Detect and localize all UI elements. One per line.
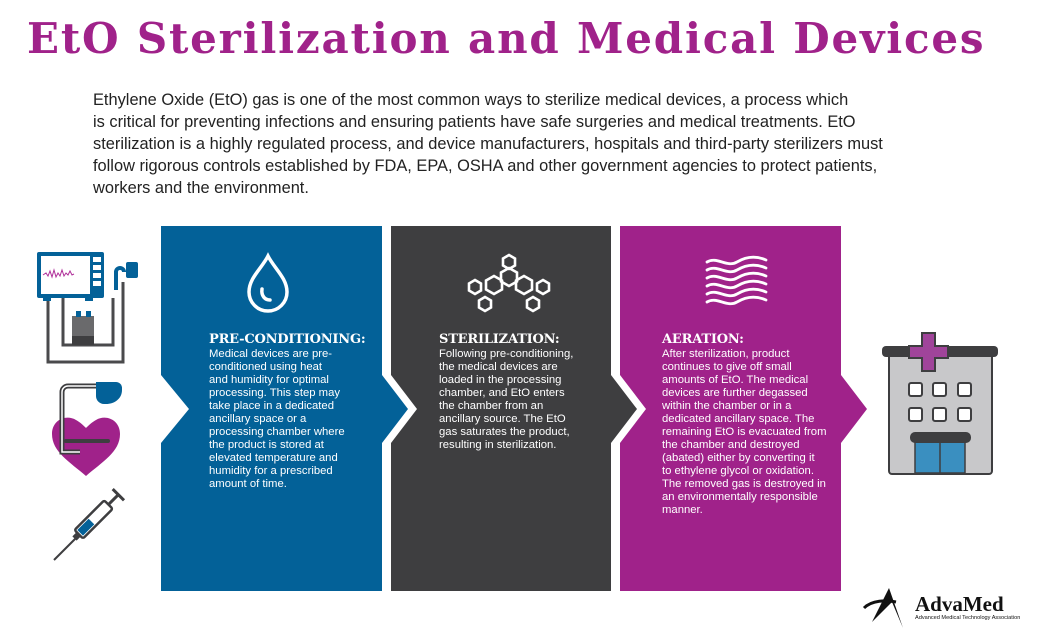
- text: sterilization: chamber, and EtO enters: [439, 387, 565, 399]
- text: aeration: devices are further degassed: [662, 387, 808, 399]
- title: EtO Sterilization and Medical Devices: [27, 14, 985, 63]
- text: pre-conditioning: [209, 332, 365, 490]
- text: pre-conditioning: elevated temperature and: [209, 452, 338, 464]
- panel: pre-conditioning: [161, 226, 408, 591]
- icon: molecule hexagons: [469, 255, 549, 311]
- text: aeration: (abated) either by converting it: [662, 452, 815, 464]
- text: sterilization: Following pre-conditioning,: [439, 348, 573, 360]
- text: aeration: within the chamber or in a: [662, 400, 791, 412]
- text: sterilization: the chamber from an: [439, 400, 543, 412]
- text: pre-conditioning: take place in a dedicated: [209, 400, 334, 412]
- text: aeration: AERATION:: [662, 332, 744, 347]
- text: sterilization: [439, 332, 573, 451]
- panel: sterilization: [391, 226, 637, 591]
- text: sterilization: loaded in the processing: [439, 374, 561, 386]
- text: sterilization: gas saturates the product,: [439, 426, 570, 438]
- logo text: [915, 592, 1020, 621]
- text: aeration: remaining EtO is evacuated from: [662, 426, 827, 438]
- intro text: is critical for preventing infections and ensuring patients have safe surgeries and medical treatments. EtO: [93, 113, 856, 131]
- panel: aeration: [620, 226, 867, 591]
- text: aeration: manner.: [662, 504, 703, 516]
- text: pre-conditioning: humidity for a prescribed: [209, 465, 333, 477]
- text: pre-conditioning: processing. This step may: [209, 387, 340, 399]
- text: pre-conditioning: ancillary space or a: [209, 413, 306, 425]
- icon: patient monitor: [37, 252, 138, 362]
- text: sterilization: resulting in sterilization.: [439, 439, 556, 451]
- text: sterilization: STERILIZATION:: [439, 332, 559, 347]
- intro text: [93, 91, 883, 197]
- intro text: follow rigorous controls established by FDA, EPA, OSHA and other government agencies to protect patients,: [93, 157, 877, 175]
- text: aeration: dedicated ancillary space. The: [662, 413, 814, 425]
- text: pre-conditioning: Medical devices are pre-: [209, 348, 332, 360]
- text: pre-conditioning: PRE-CONDITIONING:: [209, 332, 365, 347]
- logo: AdvaMed mark: [864, 588, 903, 628]
- text: aeration: [662, 332, 827, 516]
- text: aeration: to ethylene glycol or oxidation.: [662, 465, 814, 477]
- logo text: AdvaMed: [915, 592, 1004, 616]
- text: sterilization: ancillary source. The EtO: [439, 413, 566, 425]
- text: pre-conditioning: the product is stored at: [209, 439, 324, 451]
- intro text: sterilization is a highly regulated process, and device manufacturers, hospitals and third-party sterilizers must: [93, 135, 883, 153]
- icon: heart with pacemaker: [52, 382, 122, 476]
- text: aeration: continues to give off small: [662, 361, 792, 373]
- intro text: workers and the environment.: [93, 179, 309, 197]
- text: aeration: amounts of EtO. The medical: [662, 374, 808, 386]
- text: pre-conditioning: conditioned using heat: [209, 361, 322, 373]
- icon: hospital: [882, 333, 998, 474]
- text: pre-conditioning: and humidity for optimal: [209, 374, 329, 386]
- text: aeration: the chamber and destroyed: [662, 439, 800, 451]
- text: aeration: After sterilization, product: [662, 348, 789, 360]
- text: aeration: an environmentally responsible: [662, 491, 818, 503]
- intro text: Ethylene Oxide (EtO) gas is one of the most common ways to sterilize medical devices, a process which: [93, 91, 848, 109]
- icon: waves: [707, 257, 766, 304]
- logo text: Advanced Medical Technology Association: [915, 615, 1020, 621]
- text: aeration: The removed gas is destroyed in: [662, 478, 826, 490]
- icon: syringe: [54, 489, 124, 560]
- text: pre-conditioning: processing chamber where: [209, 426, 345, 438]
- text: sterilization: the medical devices are: [439, 361, 558, 373]
- icon: water drop: [249, 256, 287, 311]
- text: pre-conditioning: amount of time.: [209, 478, 287, 490]
